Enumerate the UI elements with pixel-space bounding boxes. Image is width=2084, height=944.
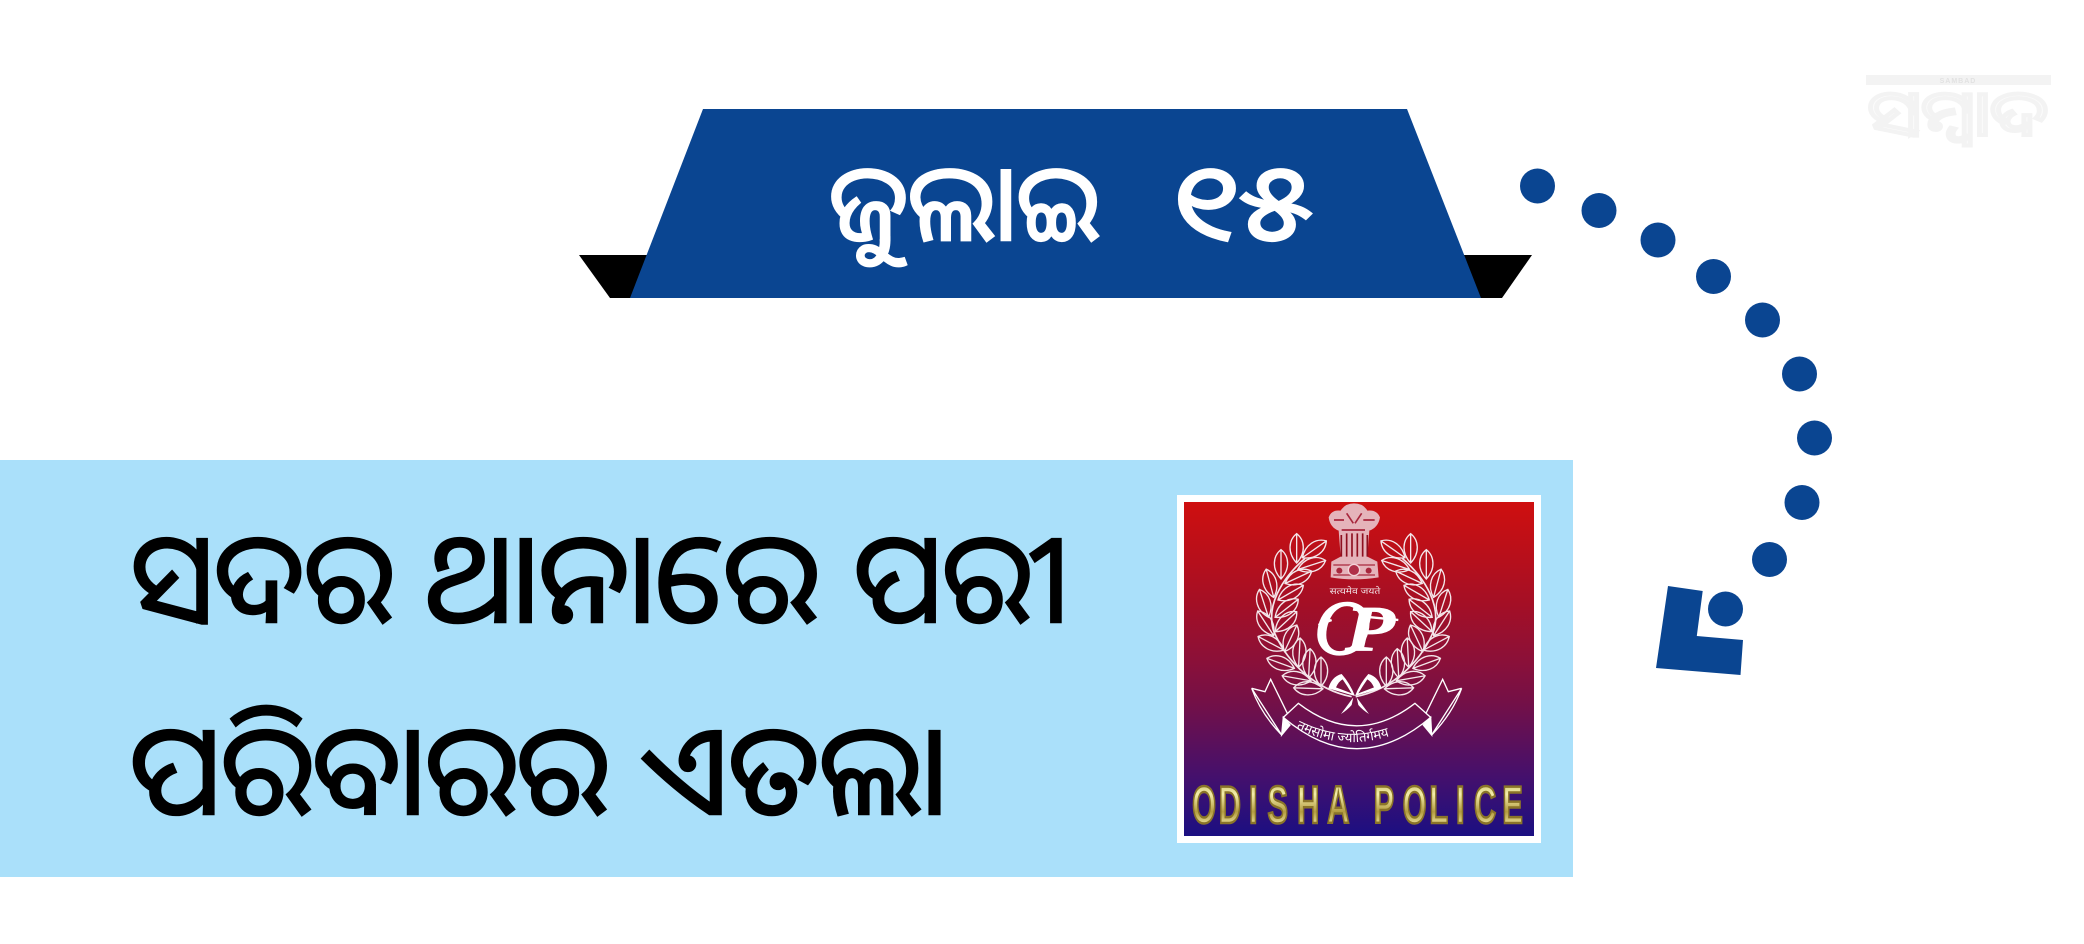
right branch — [1356, 534, 1455, 697]
banner trapezoid — [630, 109, 1481, 298]
OP monogram — [1314, 584, 1398, 671]
logo caption: ODISHAPOLICE — [1192, 777, 1523, 835]
police crest — [1252, 503, 1455, 697]
banner date text — [829, 145, 1311, 267]
left branch — [1252, 534, 1352, 697]
headline text: ପରୀ — [854, 508, 1068, 649]
wreath — [1252, 534, 1455, 697]
banner fold: left — [579, 255, 660, 298]
watermark: Sambad logo: SAMBAD — [1940, 78, 1976, 85]
ribbon and bow — [1251, 674, 1462, 750]
dotted curved arrow — [1520, 168, 1832, 675]
bow — [1328, 674, 1382, 714]
OP monogram: O — [1314, 584, 1371, 671]
ribbon and bow: तमसोमा ज्योतिर्गमय — [1298, 720, 1388, 742]
Odisha Police logo — [1177, 495, 1541, 843]
OP monogram: P — [1344, 594, 1397, 666]
date banner — [579, 109, 1532, 298]
headline text: ଥାନାରେ — [425, 508, 818, 649]
arrow head — [1656, 586, 1743, 675]
headline text — [130, 508, 1068, 841]
banner date text: ୧୫ — [1171, 145, 1311, 263]
banner date text: ଜୁଲାଇ — [829, 145, 1100, 267]
headline text: ଏତଲା — [642, 700, 947, 841]
headline panel — [0, 460, 1573, 877]
watermark: Sambad logo: ସମ୍ବାଦ — [1868, 80, 2048, 149]
national emblem — [1329, 503, 1380, 579]
motto top: सत्यमेव जयते — [1330, 585, 1381, 596]
headline text: ସଦର — [131, 508, 393, 649]
motto ribbon — [1252, 679, 1462, 749]
headline text: ପରିବାରର — [130, 700, 608, 841]
banner fold: right — [1450, 255, 1532, 298]
